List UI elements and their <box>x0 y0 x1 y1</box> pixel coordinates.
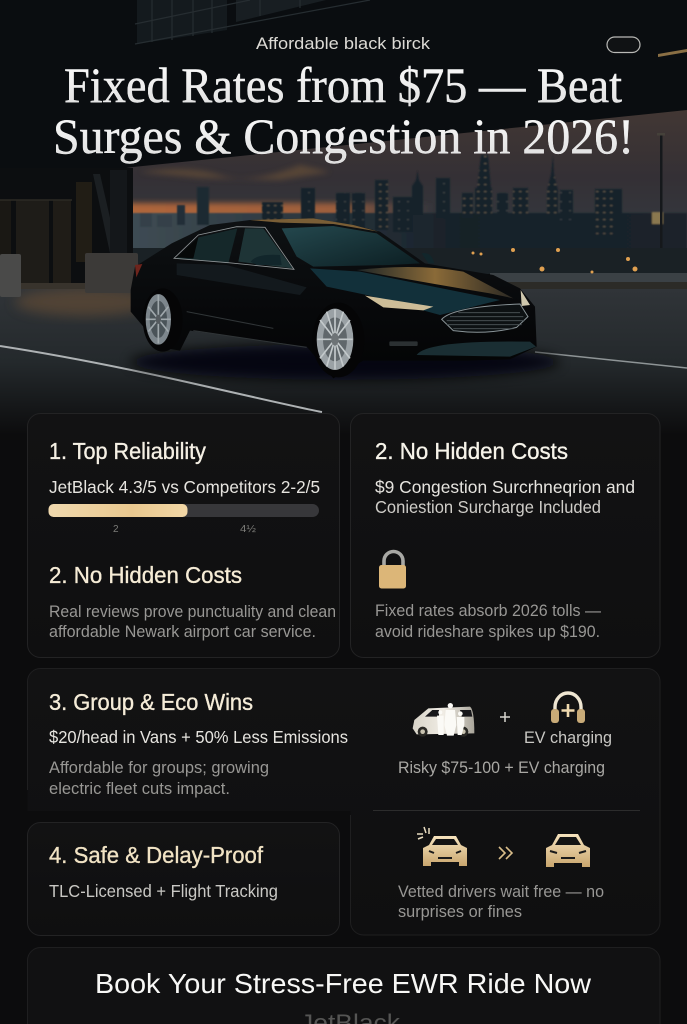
main title: Fixed Rates from $75 — Beat <box>64 57 622 113</box>
wing mirrors <box>251 253 434 265</box>
windshield <box>282 226 420 267</box>
icon: car <box>546 834 590 867</box>
heading: top reliability: 1. Top Reliability <box>49 438 206 464</box>
heading: safe and delay-proof: 4. Safe & Delay-Proof <box>49 842 264 868</box>
panel: group and eco wins <box>28 668 660 935</box>
side door reflection <box>177 263 307 295</box>
heading: no hidden costs: 2. No Hidden Costs <box>375 438 568 464</box>
warm road reflection <box>15 288 155 316</box>
plus sign <box>500 712 510 722</box>
street lamp <box>657 133 665 248</box>
road surface fading into the page colour <box>0 289 687 435</box>
bar label high: 4½ <box>240 524 257 535</box>
door lines <box>187 312 307 347</box>
grille <box>442 304 528 332</box>
window chrome trim <box>174 227 294 269</box>
reviews description: Real reviews prove punctuality and clean <box>49 603 336 621</box>
dusk sky <box>100 100 687 255</box>
front bumper <box>417 341 536 357</box>
fixed rates description: avoid rideshare spikes up $190. <box>375 623 600 641</box>
icon: EV charging headset <box>551 693 585 723</box>
licensing statement: TLC-Licensed + Flight Tracking <box>49 881 278 901</box>
call to action heading: Book Your Stress-Free EWR Ride Now <box>95 968 591 999</box>
reviews description: affordable Newark airport car service. <box>49 623 316 641</box>
car body <box>131 218 537 378</box>
hood <box>357 267 513 298</box>
hood lower teal panel <box>310 268 500 315</box>
terminal overhang <box>0 0 687 172</box>
vetted drivers description: Vetted drivers wait free — no <box>398 883 604 901</box>
brand tagline: Affordable black birck <box>256 34 431 53</box>
vetted drivers description <box>398 883 604 921</box>
surcharge statement: $9 Congestion Surcrhneqrion and <box>375 477 635 497</box>
road markings <box>0 346 687 412</box>
city skyline <box>125 155 687 250</box>
rating comparison: JetBlack 4.3/5 vs Competitors 2-2/5 <box>49 477 320 497</box>
main title: Surges & Congestion in 2026! <box>53 108 634 164</box>
black sedan <box>131 218 537 378</box>
groups description <box>49 759 269 798</box>
fixed rates description: Fixed rates absorb 2026 tolls — <box>375 602 601 620</box>
panel: no hidden costs <box>350 414 660 658</box>
hero photo: airport terminal, skyline and road <box>0 0 687 435</box>
upper glass facade <box>135 0 370 44</box>
terminal lower facade <box>0 168 138 297</box>
heading: no hidden costs: 2. No Hidden Costs <box>49 562 242 588</box>
panel: top reliability <box>28 414 340 658</box>
heading: group and eco wins: 3. Group & Eco Wins <box>49 689 253 715</box>
vetted drivers description: surprises or fines <box>398 903 522 921</box>
front wheel <box>312 303 364 377</box>
roof sheen <box>250 218 378 232</box>
risky price label: Risky $75-100 + EV charging <box>398 759 605 777</box>
surcharge statement: Coniestion Surcharge Included <box>375 497 601 517</box>
car shadow <box>130 344 560 380</box>
icon: padlock <box>379 552 406 588</box>
bar label low: 2 <box>113 524 119 535</box>
groups description: electric fleet cuts impact. <box>49 780 230 798</box>
far embankment with lights <box>125 248 687 297</box>
panel: call to action <box>28 948 660 1024</box>
front side window <box>238 228 293 268</box>
icon: van with passengers <box>413 703 474 737</box>
reviews description <box>49 603 336 641</box>
rear side window <box>177 228 237 263</box>
van price statement: $20/head in Vans + 50% Less Emissions <box>49 727 348 747</box>
light strip on overhang <box>658 49 687 57</box>
headlight <box>365 296 433 310</box>
fixed rates description <box>375 602 601 641</box>
rating bar <box>48 504 319 517</box>
chevrons arrow <box>499 847 512 859</box>
rear wheel <box>143 288 183 352</box>
icon: alert car <box>417 827 467 866</box>
EV charging label: EV charging <box>524 729 612 747</box>
outlined pill badge <box>607 37 640 52</box>
main title <box>53 57 634 164</box>
groups description: Affordable for groups; growing <box>49 759 269 777</box>
tail light <box>135 264 142 277</box>
panel: safe and delay-proof <box>28 822 340 936</box>
surcharge statement <box>375 477 635 517</box>
